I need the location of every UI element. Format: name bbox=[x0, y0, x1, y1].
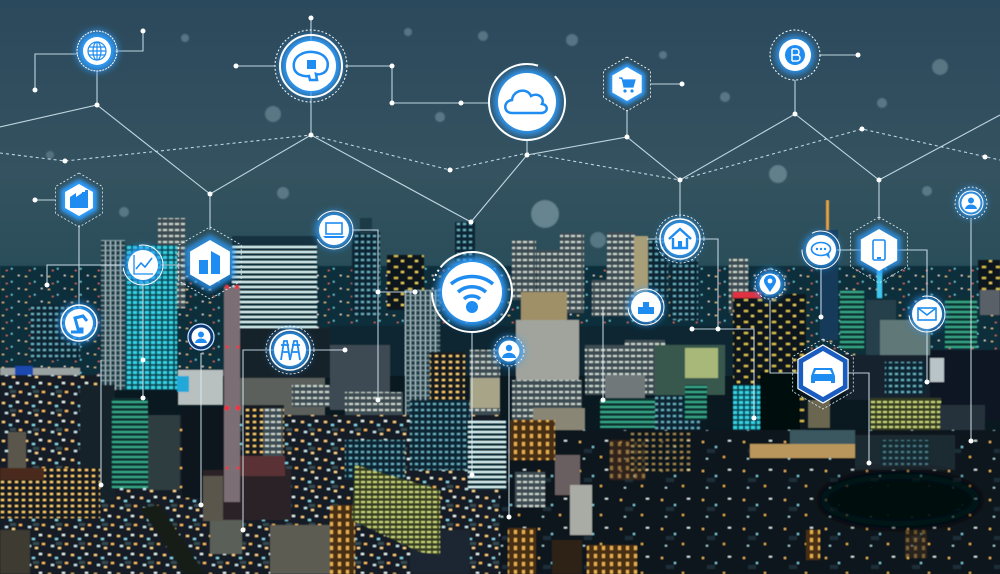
bokeh light spots bbox=[46, 28, 948, 248]
icon: power towers bbox=[266, 326, 314, 374]
icon: laptop bbox=[315, 211, 353, 249]
icon: shopping cart hexagon bbox=[604, 57, 650, 111]
icon: city buildings hexagon bbox=[179, 227, 241, 299]
distant city band bbox=[0, 266, 1000, 376]
icon: person top right bbox=[955, 187, 987, 219]
icon: person small bbox=[187, 323, 215, 351]
icon: factory hexagon bbox=[56, 173, 102, 227]
icon: smartphone hexagon bbox=[850, 217, 908, 283]
icon: school building bbox=[628, 289, 664, 325]
low-rise city right bbox=[500, 430, 1000, 574]
centre lower buildings bbox=[270, 378, 645, 574]
icon: globe bbox=[77, 31, 117, 71]
icon: chat bubble bbox=[802, 231, 840, 269]
solid mesh lines bbox=[0, 105, 1000, 222]
icon: wifi bbox=[432, 252, 512, 332]
white striped glass tower bbox=[232, 236, 317, 328]
grey office block bbox=[512, 320, 585, 433]
railway bbox=[140, 505, 205, 574]
distant towers centre bbox=[352, 218, 1000, 322]
icon: car hexagon bbox=[793, 339, 853, 409]
city skyline photo bbox=[0, 200, 1000, 574]
mid-centre low buildings bbox=[630, 430, 955, 472]
mid-rise band centre bbox=[585, 340, 725, 430]
tall teal tower left bbox=[30, 218, 185, 390]
tall chimney with red lights bbox=[224, 285, 240, 502]
communications tower bbox=[820, 200, 882, 340]
left lower buildings bbox=[0, 385, 284, 574]
icon: growth chart bbox=[123, 245, 163, 285]
icon: house bbox=[656, 215, 704, 263]
mid-rise band left bbox=[0, 328, 415, 455]
icon: robot arm bbox=[60, 304, 98, 342]
right mid-rise buildings bbox=[808, 291, 1000, 440]
icon: brain chip bbox=[275, 30, 347, 102]
pink roof block bbox=[203, 456, 291, 521]
dark tree area bbox=[820, 474, 980, 526]
icon: bitcoin bbox=[770, 30, 820, 80]
lit apartment block bbox=[352, 465, 440, 555]
icon: person bbox=[494, 336, 524, 366]
icon: cloud bbox=[489, 64, 565, 140]
icon: map pin bbox=[755, 269, 785, 299]
icon: envelope bbox=[909, 296, 945, 332]
white frame tower centre bbox=[405, 290, 500, 430]
low-rise city left bbox=[0, 415, 500, 574]
bottom orange buildings bbox=[508, 528, 927, 574]
dashed mesh lines bbox=[0, 129, 1000, 180]
night sky background bbox=[0, 0, 1000, 290]
dark skyscraper with lit windows bbox=[733, 292, 806, 439]
